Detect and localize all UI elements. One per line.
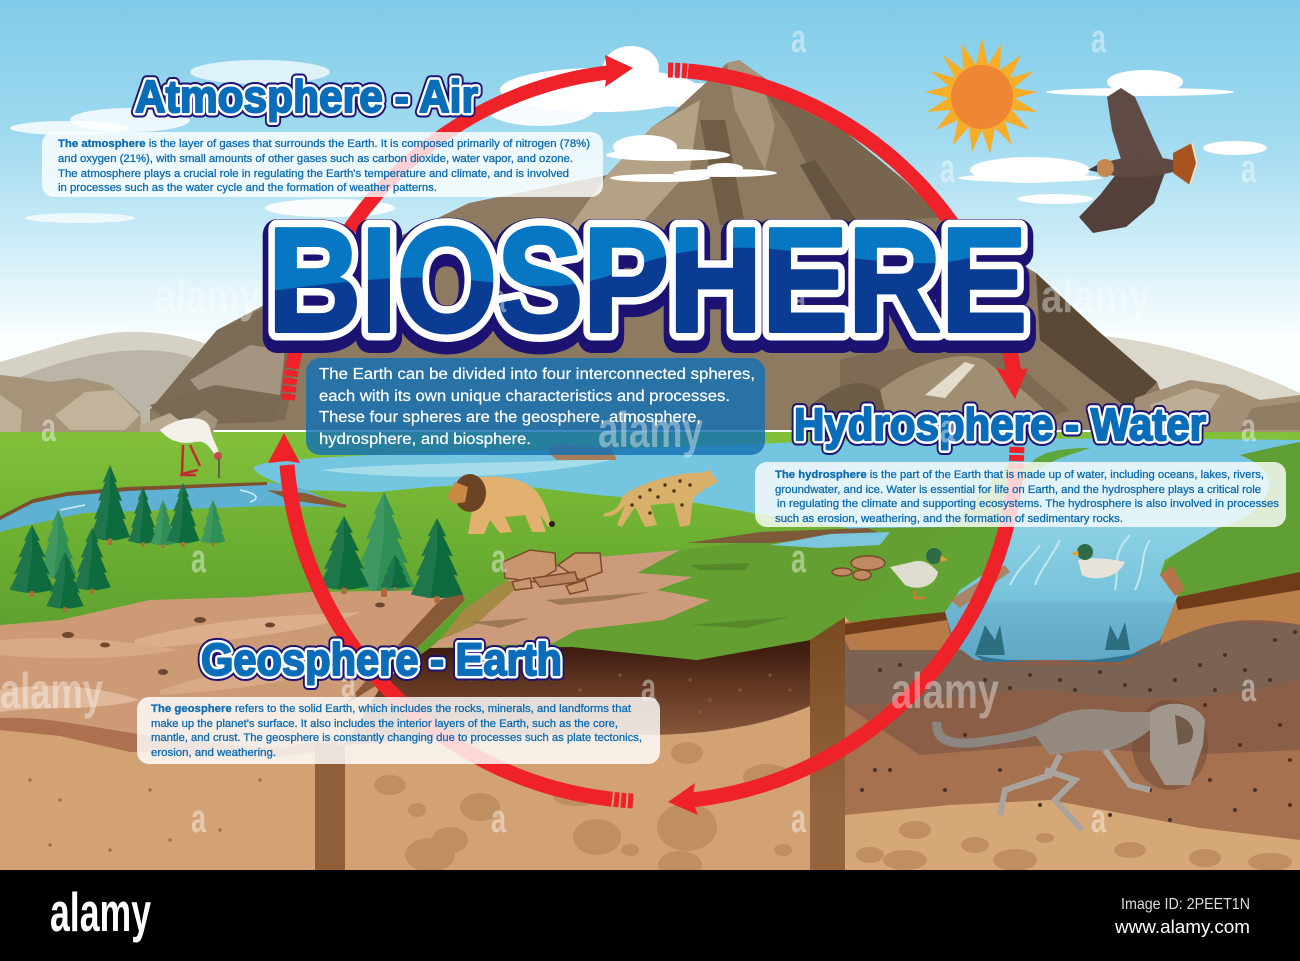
- image id: Image ID: 2PEET1N: [1121, 896, 1250, 913]
- watermarks: alamy: [1041, 270, 1150, 322]
- soil blobs: [374, 742, 1292, 879]
- watermarks: a: [1091, 797, 1107, 841]
- panel: introduction: hydrosphere, and biosphere.: [319, 431, 531, 448]
- watermarks: a: [191, 797, 207, 841]
- back wall: [345, 640, 810, 745]
- footer bar: [0, 870, 1300, 961]
- heading: Atmosphere - Air: Atmosphere - Air: [135, 71, 478, 122]
- heading: Hydrosphere - Water: Hydrosphere - Water: [794, 399, 1206, 450]
- arrow: atmosphere to hydrosphere: [668, 70, 1028, 399]
- trees: [9, 465, 463, 612]
- lower soil: [0, 660, 1300, 870]
- main title: BIOSPHERE: BIOSPHERE: [268, 198, 1027, 363]
- animal: cheetah: [603, 470, 718, 527]
- heading: Atmosphere - Air: Atmosphere - Air: [135, 71, 478, 122]
- panel: hydrosphere: [755, 399, 1286, 527]
- watermarks: alamy: [598, 402, 703, 458]
- watermarks: a: [791, 537, 807, 581]
- watermarks: alamy: [0, 663, 103, 719]
- background: sky: [0, 0, 1300, 445]
- bird: stork: [160, 418, 222, 478]
- right grass and pond: [845, 512, 1300, 662]
- central surface with path: [430, 527, 950, 660]
- text block: atmosphere description: in processes such as the water cycle and the formation of weather patterns.: [58, 182, 437, 194]
- watermarks: a: [1241, 666, 1257, 710]
- ground cross-section: [0, 572, 1300, 879]
- panel: introduction: each with its own unique characteristics and processes.: [319, 388, 730, 405]
- mountain: [150, 60, 1175, 430]
- text block: atmosphere description: and oxygen (21%), with small amounts of other gases such as carbon dioxide, water vapor, and ozone.: [58, 153, 573, 165]
- text block: geosphere description: mantle, and crust. The geosphere is constantly changing due to processes such as plate tectonics,: [151, 732, 642, 744]
- panel: introduction: [306, 358, 765, 455]
- arrow: hydrosphere to geosphere: [668, 447, 1017, 815]
- watermarks: a: [491, 537, 507, 581]
- text block: atmosphere description: The atmosphere plays a crucial role in regulating the Earth's temperature and climate, and is involved: [58, 168, 569, 180]
- text block: geosphere description: The geosphere refers to the solid Earth, which includes the rocks, minerals, and landforms that: [151, 703, 632, 715]
- watermarks: alamy: [891, 663, 999, 719]
- watermarks: a: [191, 537, 207, 581]
- watermarks: a: [1241, 147, 1257, 191]
- heading: Atmosphere - Air: Atmosphere - Air: [135, 71, 478, 122]
- heading: Geosphere - Earth: Geosphere - Earth: [201, 634, 562, 685]
- text block: hydrosphere description: [755, 462, 1286, 527]
- dinosaur fossil: [937, 700, 1208, 830]
- watermarks: a: [1241, 406, 1257, 450]
- heading: Geosphere - Earth: Geosphere - Earth: [201, 634, 562, 685]
- panel: atmosphere: [42, 71, 603, 197]
- panel: introduction: These four spheres are the geosphere, atmosphere,: [319, 409, 701, 426]
- distant hills: [0, 332, 1300, 430]
- heading: Geosphere - Earth: Geosphere - Earth: [201, 634, 562, 685]
- bird: eagle: [1079, 88, 1197, 233]
- text block: geosphere description: erosion, and weathering.: [151, 747, 276, 759]
- text block: hydrosphere description: in regulating the climate and supporting ecosystems. The hydrosphere is also involved in processes: [777, 498, 1279, 510]
- main title: BIOSPHERE: BIOSPHERE: [268, 204, 1027, 369]
- icon: sun: [925, 38, 1038, 154]
- heading: Hydrosphere - Water: Hydrosphere - Water: [794, 399, 1206, 450]
- watermarks: a: [791, 797, 807, 841]
- watermarks: a: [341, 662, 357, 706]
- text block: geosphere description: [137, 697, 660, 764]
- animal: ducks: [890, 544, 1125, 598]
- text block: hydrosphere description: such as erosion, weathering, and the formation of sedimentary rocks.: [775, 513, 1123, 525]
- text block: hydrosphere description: groundwater, and ice. Water is essential for life on Earth, and the hydrosphere plays a critical role: [775, 484, 1261, 496]
- main title: BIOSPHERE: BIOSPHERE: [268, 198, 1027, 363]
- panel: geosphere: [137, 634, 660, 764]
- watermarks: a: [491, 797, 507, 841]
- watermarks: a: [791, 277, 807, 321]
- watermarks: a: [41, 406, 57, 450]
- panel: introduction: The Earth can be divided into four interconnected spheres,: [319, 366, 755, 383]
- animal: lion: [447, 474, 555, 534]
- heading: Hydrosphere - Water: Hydrosphere - Water: [794, 399, 1206, 450]
- clouds over mountain: [606, 135, 777, 182]
- rocks on path: [503, 550, 885, 594]
- left surface plate: [0, 590, 465, 757]
- text block: atmosphere description: The atmosphere is the layer of gases that surrounds the Earth. It is composed primarily of nitrogen (78%): [58, 138, 590, 150]
- watermarks: a: [940, 147, 956, 191]
- logo: alamy: alamy: [50, 881, 151, 943]
- watermarks: a: [791, 17, 807, 61]
- speckles: [862, 632, 1295, 820]
- watermarks: a: [940, 407, 956, 451]
- arrow: biosphere to atmosphere: [288, 55, 633, 400]
- animal: capybara: [548, 444, 617, 460]
- text block: hydrosphere description: The hydrosphere is the part of the Earth that is made up of water, including oceans, lakes, rivers,: [775, 469, 1264, 481]
- lake and rivers: [0, 439, 1300, 532]
- circular arrows: [268, 55, 1028, 815]
- website: www.alamy.com: [1114, 917, 1250, 937]
- watermarks: alamy: [155, 270, 260, 322]
- rocks left and right: [0, 375, 1300, 436]
- right layers: [845, 572, 1300, 840]
- arrow: geosphere to biosphere: [268, 433, 633, 801]
- watermarks: a: [1091, 17, 1107, 61]
- columns: [315, 745, 345, 870]
- watermarks: a: [491, 277, 507, 321]
- grassland: [0, 432, 1300, 660]
- clouds: [10, 46, 1267, 223]
- text block: atmosphere description: [42, 132, 603, 197]
- watermarks: a: [641, 666, 657, 710]
- text block: geosphere description: make up the planet's surface. It also includes the interior layers of the Earth, such as the core,: [151, 718, 618, 730]
